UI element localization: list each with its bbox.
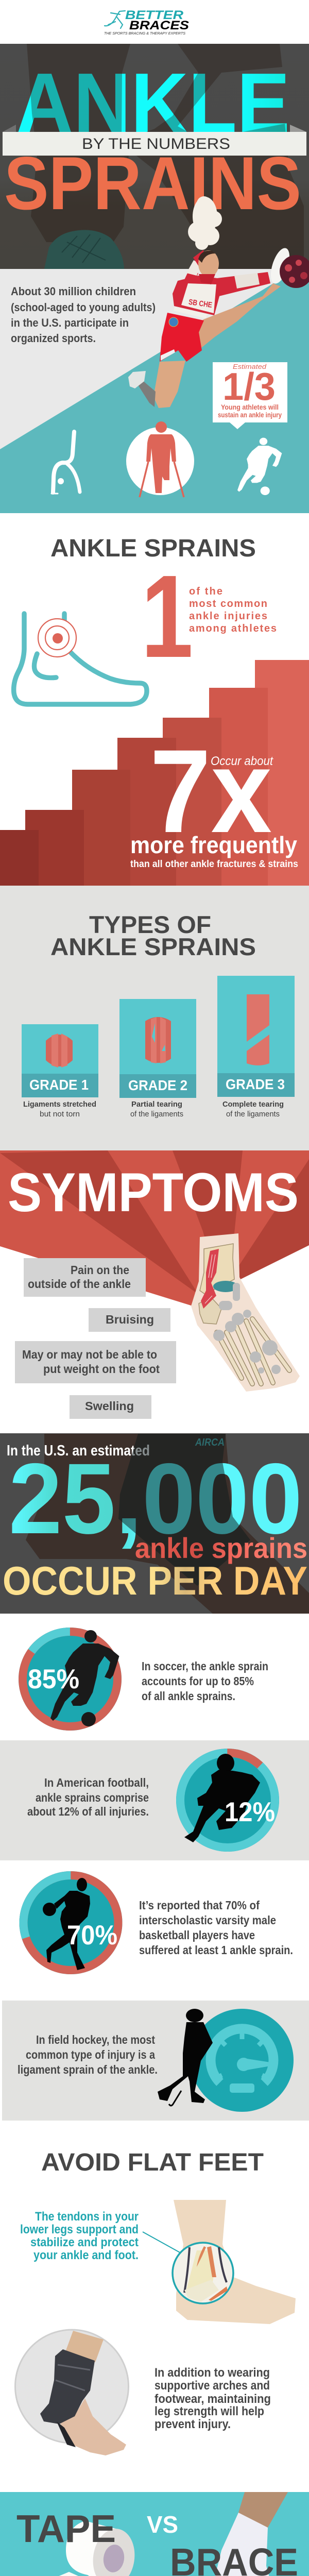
ligament fully torn xyxy=(247,994,269,1065)
staircase chart xyxy=(0,660,309,886)
banner fold left xyxy=(3,125,16,132)
callout: one third: Estimated xyxy=(233,363,267,370)
panel: avoid flat feet xyxy=(15,2149,296,2455)
photo: shoe xyxy=(44,230,124,269)
text: prevention: leg strength will help xyxy=(154,2404,264,2418)
panel: ankle sprains xyxy=(0,535,309,886)
photo: legs silhouette xyxy=(27,44,304,269)
text: basketball players have xyxy=(139,1928,255,1942)
icon: foot outline with target xyxy=(14,614,147,704)
statistic text: among athletes xyxy=(189,623,277,634)
photo: foot xyxy=(26,1434,309,1614)
icon: runner xyxy=(105,11,125,28)
panel: 25,000 per day xyxy=(0,1433,309,1614)
header logo: BRACES xyxy=(129,19,189,32)
intro text: About 30 million children xyxy=(11,285,136,298)
symptom: weight xyxy=(15,1341,176,1383)
text: more frequently: more frequently xyxy=(130,832,297,858)
statistic text xyxy=(189,586,277,634)
grade 2 card: GRADE 2 xyxy=(128,1077,187,1093)
silhouette: basketball player xyxy=(43,1878,90,1970)
big number one: 1 xyxy=(141,551,193,682)
icon: gauge xyxy=(191,2009,294,2112)
header logo: BETTER xyxy=(125,8,184,22)
text: In field hockey, the most xyxy=(36,2033,155,2046)
grade 3 card: GRADE 3 xyxy=(226,1076,285,1092)
collar xyxy=(199,274,215,284)
text: tendons xyxy=(20,2210,139,2262)
text: ligament sprain of the ankle. xyxy=(18,2063,158,2076)
illustration: leg and foot xyxy=(174,2200,296,2324)
text: In American football, xyxy=(44,1776,149,1789)
subheading: BY THE NUMBERS xyxy=(82,135,230,152)
illustration: tendon detail xyxy=(173,2243,233,2303)
statistic text: of the xyxy=(189,586,222,597)
teal diagonal xyxy=(0,269,309,513)
statistic: 25,000: 25,000 xyxy=(9,1443,302,1555)
value: 85% xyxy=(28,1664,79,1694)
text: prevention: In addition to wearing xyxy=(154,2366,270,2380)
callout: one third: Young athletes will xyxy=(221,403,279,411)
donut chart: 70 percent xyxy=(11,1863,130,1982)
symptom: swelling: Swelling xyxy=(85,1399,134,1413)
symptom: bruising xyxy=(89,1308,170,1332)
bent leg xyxy=(153,361,185,408)
text xyxy=(27,1776,149,1818)
torso xyxy=(173,276,219,315)
icon: gymnast xyxy=(52,432,80,494)
text: about 12% of all injuries. xyxy=(27,1805,149,1818)
text xyxy=(139,1899,293,1957)
panel: intro xyxy=(0,196,309,513)
callout: one third: 1/3 xyxy=(222,365,276,408)
grade 3 card: of the ligaments xyxy=(226,1110,280,1118)
text: interscholastic varsity male xyxy=(139,1913,276,1927)
header logo: THE SPORTS BRACING & THERAPY EXPERTS xyxy=(104,31,185,36)
header logo xyxy=(104,8,189,36)
panel: symptoms xyxy=(0,1150,309,1434)
brace lettering: AIRCA xyxy=(195,1437,225,1448)
heading: TYPES OF xyxy=(89,911,211,938)
sunburst xyxy=(0,1150,309,1306)
photo: cheerleader xyxy=(128,196,309,408)
value: 70% xyxy=(67,1920,117,1951)
grade 3 card xyxy=(217,976,295,1118)
heading: ANKLE SPRAINS xyxy=(50,535,256,562)
pompom dark xyxy=(280,255,309,288)
symptom: weight: May or may not be able to xyxy=(22,1348,157,1361)
statistic text: most common xyxy=(189,598,267,609)
intro text: (school-aged to young adults) xyxy=(11,301,156,314)
text xyxy=(142,1659,268,1703)
grade 1 card xyxy=(22,1024,98,1118)
pompom white xyxy=(188,196,222,250)
panel: tape vs brace xyxy=(0,2492,309,2576)
silhouette: football player xyxy=(184,1754,260,1842)
text: tendons: lower legs support and xyxy=(20,2223,139,2236)
panel: field hockey statistic xyxy=(2,2001,309,2121)
grade 1 card: but not torn xyxy=(40,1110,80,1118)
skirt xyxy=(160,313,204,362)
panel: soccer statistic xyxy=(0,1613,309,1745)
patch xyxy=(169,317,178,327)
text: It’s reported that 70% of xyxy=(139,1899,260,1912)
photo: black brace xyxy=(118,1434,250,1586)
banner fold right xyxy=(290,125,306,132)
ligament intact xyxy=(46,1033,73,1067)
symptom: pain: outside of the ankle xyxy=(28,1277,131,1291)
text: prevention xyxy=(154,2366,271,2431)
symptom: weight: put weight on the foot xyxy=(43,1362,160,1376)
callout: one third: sustain an ankle injury xyxy=(218,411,282,419)
text xyxy=(18,2033,158,2076)
icon: soccer player xyxy=(237,438,282,495)
pointer line xyxy=(143,2232,181,2253)
panel: basketball statistic xyxy=(0,1860,309,2001)
donut chart: 12 percent xyxy=(176,1749,279,1852)
illustration: foot anatomy xyxy=(191,1233,300,1392)
panel: hero title xyxy=(0,44,309,269)
text: common type of injury is a xyxy=(26,2048,155,2061)
text: occur about: Occur about xyxy=(211,754,273,768)
grade 1 card: Ligaments stretched xyxy=(23,1100,96,1109)
symptom: swelling xyxy=(70,1395,151,1419)
grade 3 card: Complete tearing xyxy=(222,1100,284,1109)
text: comparison: than all other ankle fractures & strains xyxy=(130,859,298,870)
text: tendons: stabilize and protect xyxy=(30,2235,139,2249)
photo: tape roll xyxy=(0,2521,139,2576)
icon: injured person on crutches xyxy=(126,421,194,497)
grade 1 card: GRADE 1 xyxy=(29,1077,89,1093)
donut chart: 85 percent xyxy=(4,1613,136,1745)
ligament partially torn xyxy=(145,1017,171,1063)
heading: ANKLE SPRAINS xyxy=(50,933,256,960)
heading xyxy=(50,911,256,960)
head xyxy=(198,250,219,277)
text: of all ankle sprains. xyxy=(142,1689,235,1703)
silhouette: soccer player xyxy=(50,1630,119,1726)
text: prevention: footwear, maintaining xyxy=(154,2392,271,2406)
jersey lettering: SB CHE xyxy=(188,298,213,310)
heading: ANKLE: ANKLE xyxy=(16,56,290,151)
grade 2 card: Partial tearing xyxy=(131,1100,182,1109)
text: accounts for up to 85% xyxy=(142,1674,254,1688)
callout: one third xyxy=(213,362,287,429)
symptom: pain xyxy=(24,1258,146,1297)
banner xyxy=(3,132,306,156)
grade 2 card: of the ligaments xyxy=(130,1110,183,1118)
text: tendons: The tendons in your xyxy=(35,2210,139,2224)
symptom: bruising: Bruising xyxy=(106,1313,154,1326)
text: ankle sprains comprise xyxy=(36,1791,149,1804)
heading: AVOID FLAT FEET xyxy=(41,2149,264,2176)
photo: dark ankle brace on foot xyxy=(40,2331,126,2455)
text: prevention: supportive arches and xyxy=(154,2379,270,2393)
panel: football statistic xyxy=(0,1740,309,1860)
heading: vs: VS xyxy=(147,2511,178,2538)
grade 2 card xyxy=(119,999,196,1118)
intro text xyxy=(11,285,156,345)
statistic text: ankle injuries xyxy=(189,611,267,622)
heading: tape: TAPE xyxy=(16,2507,116,2550)
intro text: organized sports. xyxy=(11,332,96,345)
raised leg xyxy=(188,283,281,354)
text: In soccer, the ankle sprain xyxy=(142,1659,268,1673)
shoe raised xyxy=(267,246,293,286)
value: 12% xyxy=(225,1797,275,1827)
statistic: 7x: 7x xyxy=(150,725,272,857)
photo: brace circle xyxy=(15,2330,129,2443)
silhouette: hockey player xyxy=(158,2009,213,2106)
intro text: in the U.S. participate in xyxy=(11,316,129,329)
raised arm xyxy=(180,272,198,299)
photo: white ankle brace xyxy=(215,2492,300,2576)
waist stripes xyxy=(174,307,207,318)
text: tendons: your ankle and foot. xyxy=(33,2248,139,2262)
text: prevention: prevent injury. xyxy=(154,2417,231,2431)
symptom: pain: Pain on the xyxy=(71,1263,129,1277)
panel: types of ankle sprains xyxy=(0,886,309,1150)
outstretched arm xyxy=(217,272,270,296)
text: intro: In the U.S. an estimated xyxy=(7,1443,150,1459)
